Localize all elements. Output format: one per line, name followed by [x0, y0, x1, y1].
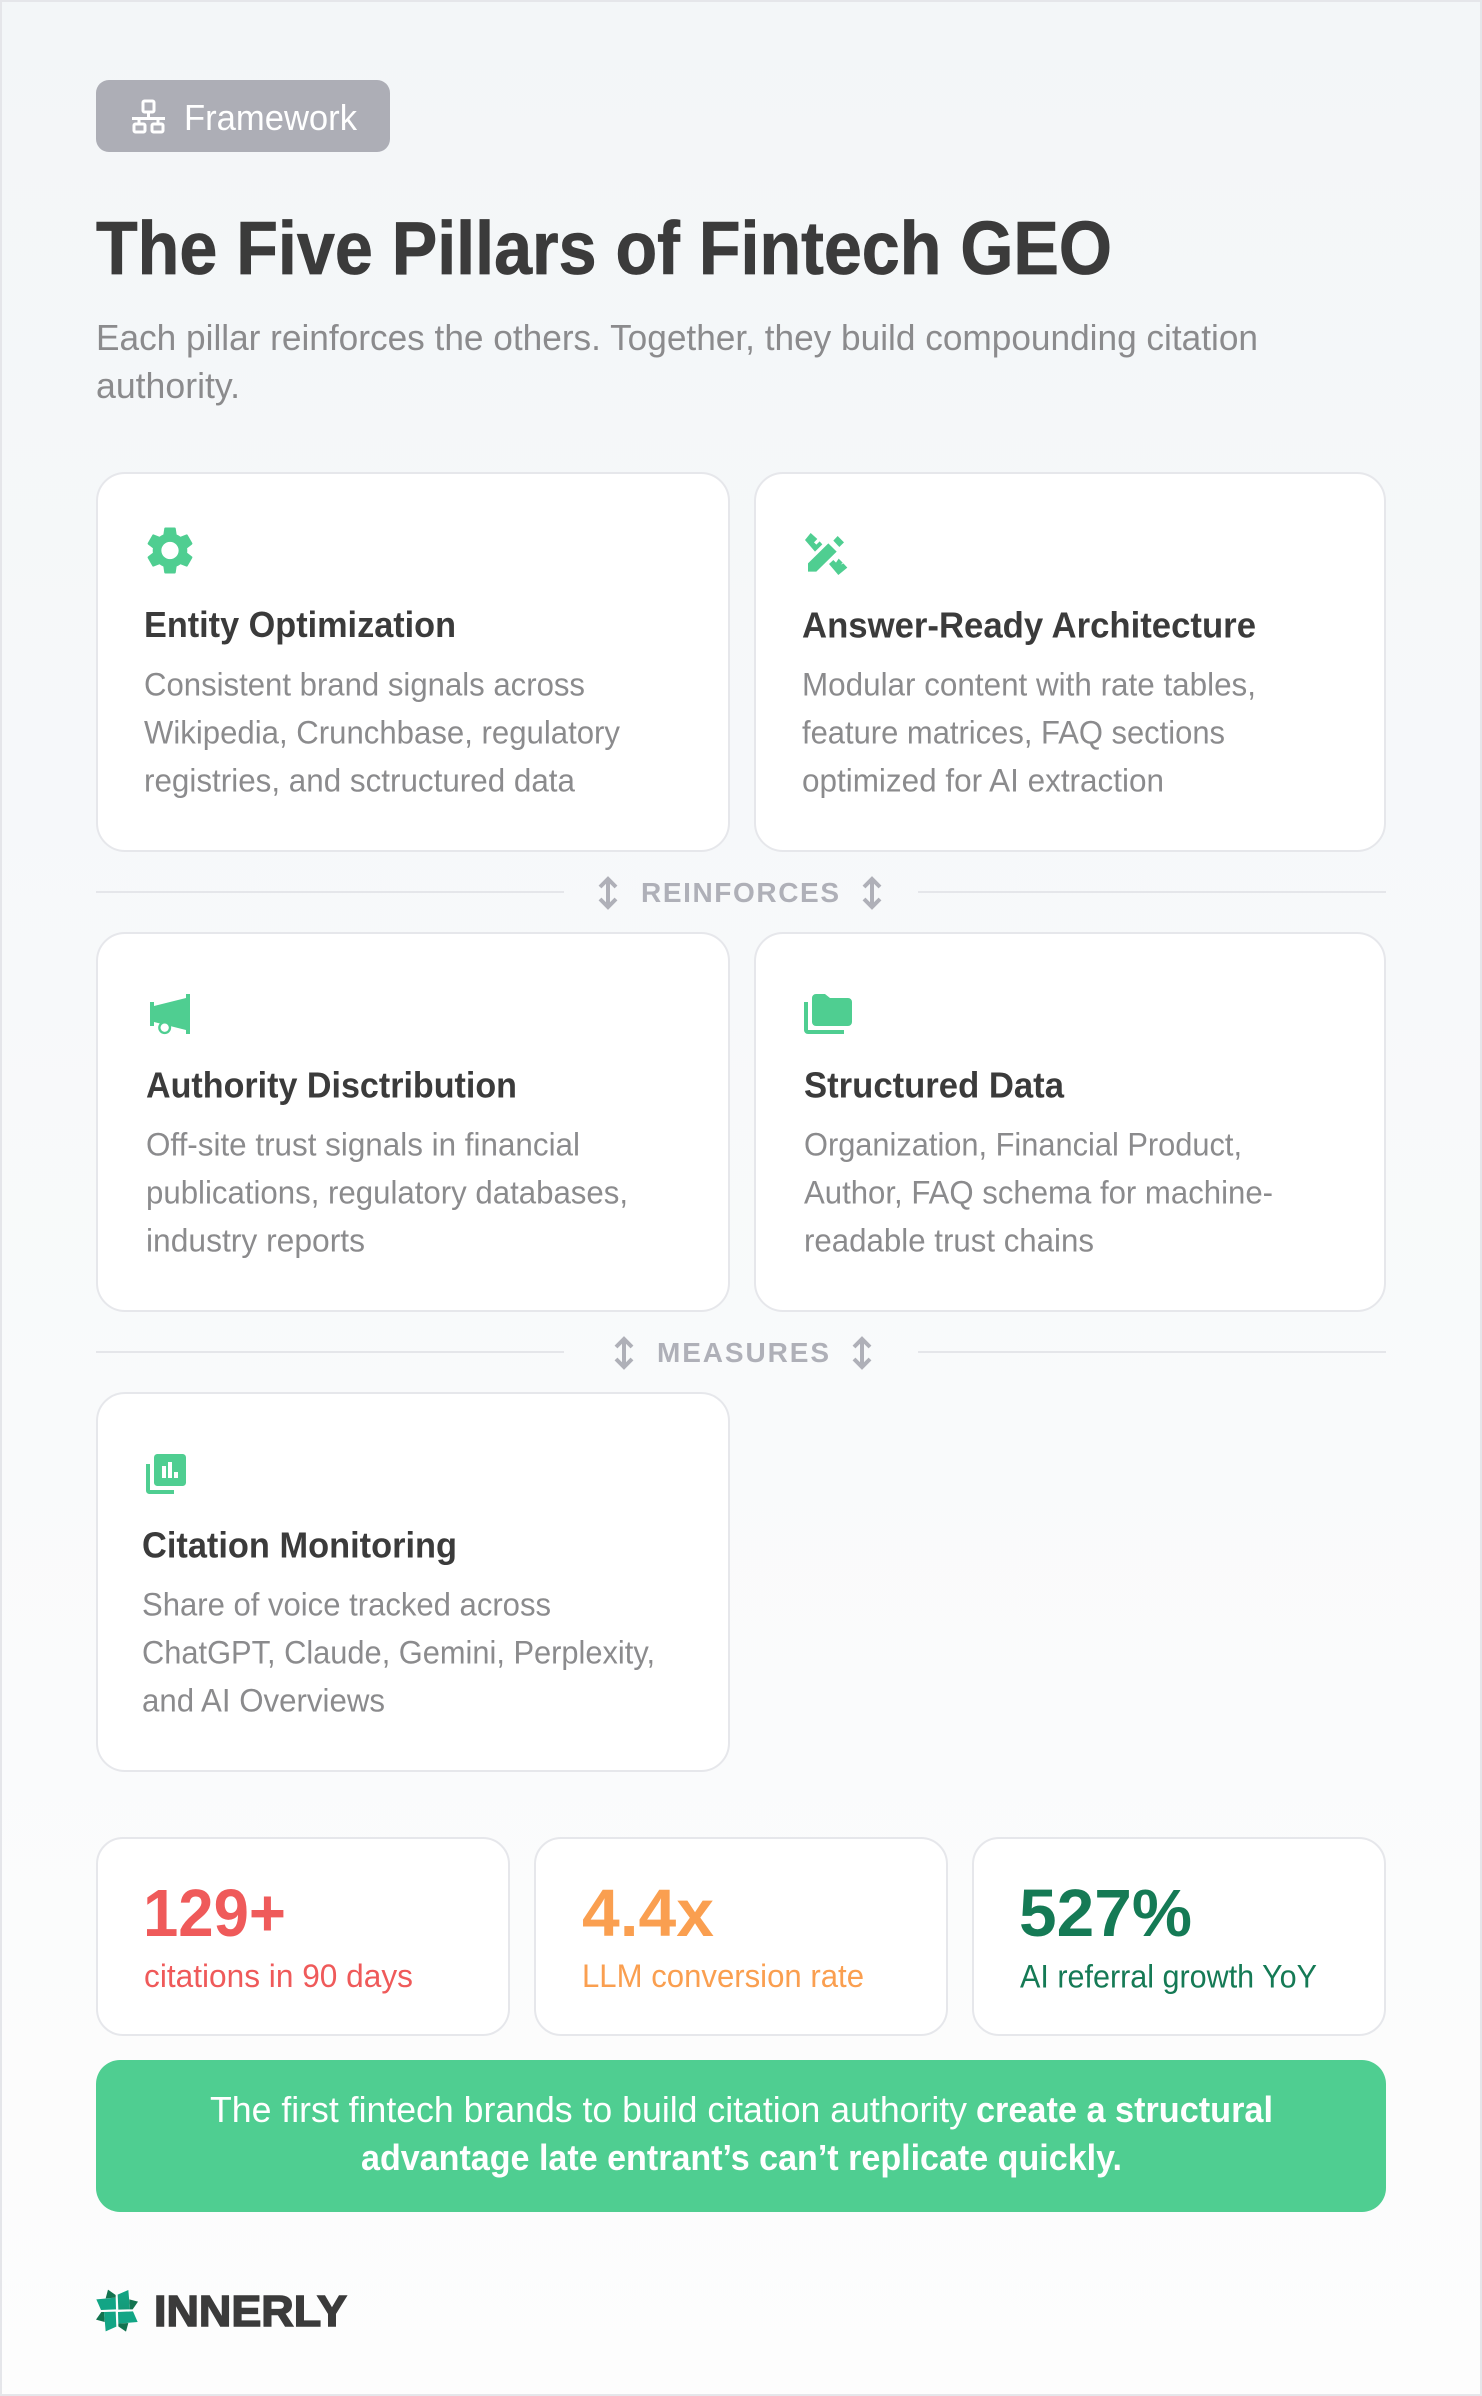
panel: Authority Disctribution: Authority Disctribution: [146, 1064, 517, 1106]
panel: Answer-Ready Architecture: [755, 473, 1385, 851]
panel: Structured Data: [755, 933, 1385, 1311]
callout banner: The first fintech brands to build citation authority: [210, 2089, 967, 2130]
panel: Structured Data: Structured Data: [804, 1064, 1065, 1106]
body text: industry reports: [146, 1222, 365, 1258]
stat: 129+ citations: 129+: [143, 1876, 286, 1951]
body text: [804, 1126, 1273, 1258]
divider: MEASURES: MEASURES: [657, 1337, 829, 1368]
body text: Modular content with rate tables,: [802, 666, 1256, 702]
stat: 527% growth: 527%: [1019, 1876, 1192, 1951]
callout banner: advantage late entrant’s can’t replicate quickly.: [361, 2137, 1122, 2178]
body text: publications, regulatory databases,: [146, 1174, 628, 1210]
stat: 527% growth: [973, 1838, 1385, 2035]
body text: [802, 666, 1256, 798]
panel: Authority Disctribution: [97, 933, 729, 1311]
body text: Consistent brand signals across: [144, 666, 585, 702]
divider: REINFORCES: [96, 877, 1386, 908]
badge: Framework: Framework: [184, 97, 358, 138]
stat: 4.4x conversion: LLM conversion rate: [582, 1958, 864, 1994]
body text: feature matrices, FAQ sections: [802, 714, 1225, 750]
icon: chart: [146, 1454, 186, 1494]
subtitle: authority.: [96, 365, 240, 406]
panel: Entity Optimization: Entity Optimization: [144, 604, 456, 645]
panel: Entity Optimization: [97, 473, 729, 851]
body text: ChatGPT, Claude, Gemini, Perplexity,: [142, 1634, 655, 1670]
body text: and AI Overviews: [142, 1682, 385, 1718]
body text: Off-site trust signals in financial: [146, 1126, 580, 1162]
stat: 4.4x conversion: [535, 1838, 947, 2035]
icon: star mark: [96, 2290, 138, 2332]
body text: Author, FAQ schema for machine-: [804, 1174, 1273, 1210]
title: The Five Pillars of Fintech GEO: [96, 206, 1112, 290]
panel: Citation Monitoring: Citation Monitoring: [142, 1524, 457, 1566]
icon: pencil and ruler: [805, 533, 847, 575]
body text: Share of voice tracked across: [142, 1586, 551, 1622]
icon: network: [132, 101, 165, 132]
icon: gear: [148, 527, 192, 574]
icon: megaphone: [150, 994, 190, 1034]
badge: Framework: [96, 80, 390, 152]
panel: Answer-Ready Architecture: Answer-Ready Architecture: [802, 604, 1256, 646]
icon: left arrow: [600, 879, 616, 907]
stat: 129+ citations: [97, 1838, 509, 2035]
icon: folders: [804, 994, 852, 1034]
icon: right arrow: [854, 1339, 870, 1367]
body text: readable trust chains: [804, 1222, 1094, 1258]
body text: [142, 1586, 655, 1718]
stat: 129+ citations: citations in 90 days: [144, 1958, 413, 1994]
icon: left arrow: [616, 1339, 632, 1367]
icon: right arrow: [864, 879, 880, 907]
body text: [144, 666, 621, 798]
subtitle: [96, 317, 1258, 406]
body text: registries, and sctructured data: [144, 762, 576, 798]
stat: 4.4x conversion: 4.4x: [582, 1876, 714, 1951]
callout banner: [96, 2060, 1386, 2212]
divider: REINFORCES: REINFORCES: [641, 877, 839, 908]
body text: [146, 1126, 628, 1258]
panel: Citation Monitoring: [97, 1393, 729, 1771]
body text: optimized for AI extraction: [802, 762, 1164, 798]
body text: Wikipedia, Crunchbase, regulatory: [144, 714, 621, 750]
body text: Organization, Financial Product,: [804, 1126, 1242, 1162]
divider: MEASURES: [96, 1337, 1386, 1368]
subtitle: Each pillar reinforces the others. Together, they build compounding citation: [96, 317, 1258, 358]
callout banner: create a structural: [976, 2089, 1273, 2130]
stat: 527% growth: AI referral growth YoY: [1020, 1958, 1317, 1994]
logo: Innerly: INNERLY: [154, 2288, 347, 2336]
